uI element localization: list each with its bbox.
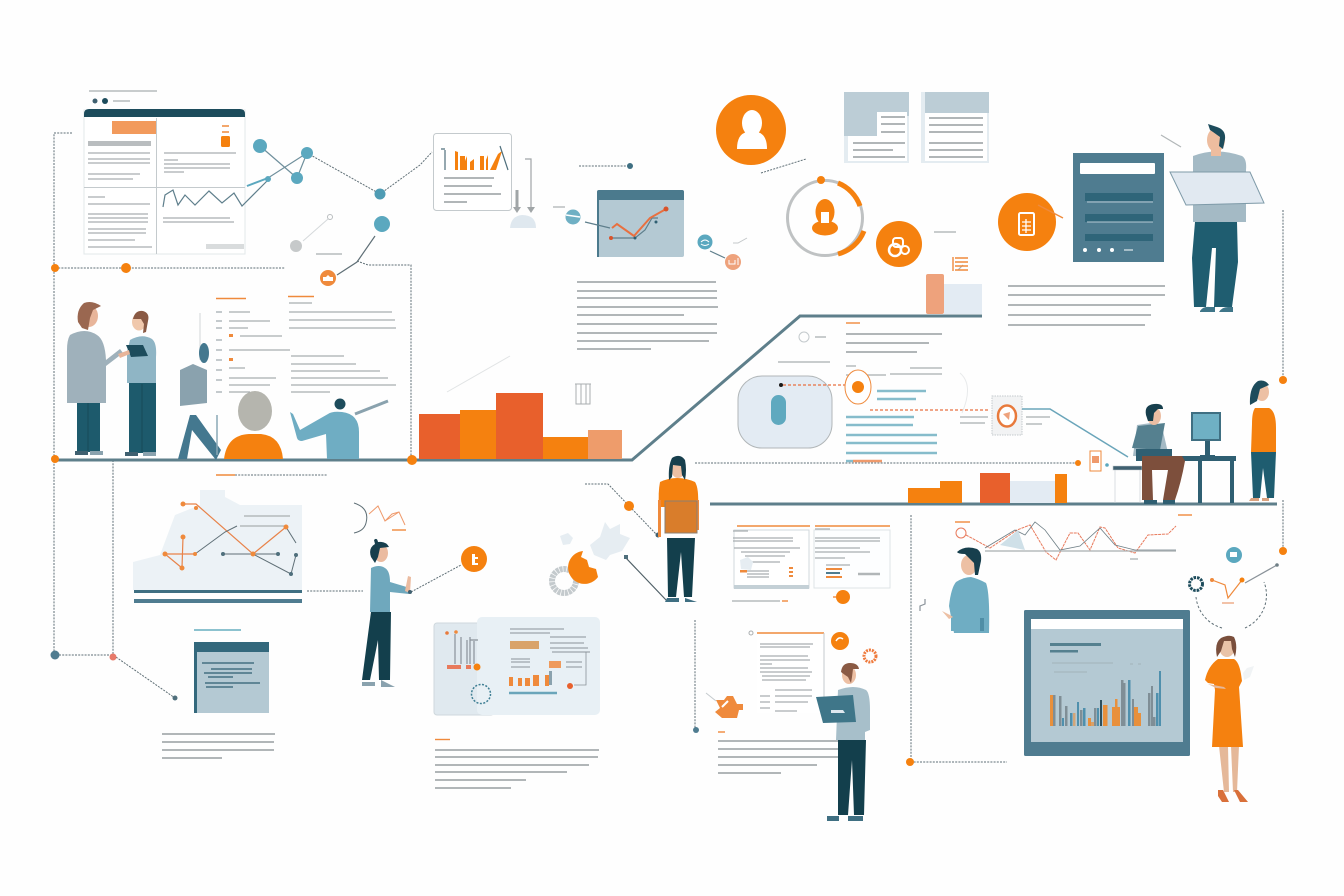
person: man in blue shirt with glasses — [920, 548, 989, 633]
network of teal nodes — [247, 139, 432, 286]
panel: rounded device with dashed callouts — [738, 370, 990, 461]
person: man in grey sweater — [67, 302, 123, 455]
card: mini infographic with arrows — [434, 134, 536, 228]
text block: beneath ledge — [778, 323, 942, 375]
panel: monitor with bar chart — [1024, 610, 1190, 756]
monitor chart bars — [1050, 671, 1161, 726]
icon: large orange user circle — [716, 95, 806, 173]
panel: teal form — [1073, 153, 1164, 262]
person: man holding laptop — [1161, 124, 1264, 312]
icon: orange seal box — [960, 396, 1128, 457]
person: woman in orange top — [1249, 380, 1276, 501]
person: presenter with bun — [362, 539, 461, 687]
panel: line chart window — [585, 190, 684, 257]
icon: orange circle with letter glyph — [461, 546, 487, 572]
panel: document with orange rule — [749, 631, 824, 713]
text block: lower centre right — [718, 732, 840, 773]
text block: bottom left — [162, 734, 275, 758]
top-left caption above document — [89, 91, 157, 104]
person: man at desk with laptop — [1113, 404, 1236, 504]
icon: orange circle with document — [998, 193, 1063, 251]
small sketch chart above presenter — [354, 503, 406, 533]
icon: orange puzzle — [706, 693, 743, 718]
person: woman in orange dress — [1205, 636, 1254, 802]
connector network: dotted lines and main ground lines — [50, 133, 1287, 766]
panel: teal text window — [194, 630, 269, 713]
person: man with laptop — [816, 663, 870, 821]
person: woman holding orange box — [585, 456, 699, 602]
text block: bottom centre — [435, 740, 599, 788]
icon: small phone with report — [1090, 451, 1109, 471]
seated audience group with presentation board — [178, 313, 388, 460]
person: colleague holding tablet — [118, 311, 156, 456]
text block: upper right — [1008, 286, 1165, 325]
bar chart: small bars on upper ledge — [926, 257, 982, 314]
text block: centre column — [577, 282, 718, 349]
panel: pale dashboard card — [434, 617, 600, 715]
line chart: network on pale panel — [133, 475, 327, 603]
bar chart: main orange bars — [419, 356, 622, 459]
annotation text notes — [216, 296, 396, 392]
panel: report dashboard document — [84, 109, 268, 254]
icon: orange badge and gear — [831, 632, 876, 662]
line chart: wavy trend lines — [955, 515, 1192, 560]
icon: orange circle with gears — [876, 221, 963, 270]
icon: orange circle with splashes and gear — [552, 522, 667, 601]
panel: paired report sheets — [732, 526, 890, 604]
small chart with dashed arc and gear — [1190, 547, 1279, 628]
bar chart: bars on lower ledge — [908, 473, 1067, 503]
icon: ring with person — [788, 176, 864, 256]
panels: document pages — [844, 92, 989, 163]
icons: teal and salmon nodes beside chart — [553, 207, 747, 270]
